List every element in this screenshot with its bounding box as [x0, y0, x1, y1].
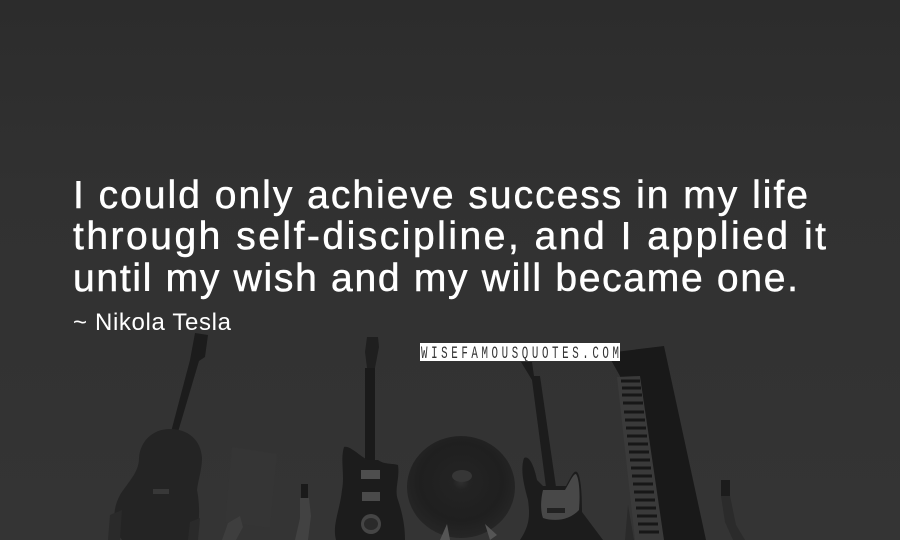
icon: cymbal — [407, 436, 515, 540]
icon: sheet of paper — [225, 447, 277, 528]
icon: bass guitar — [520, 362, 603, 540]
quote text: until my wish and my will became one. — [73, 257, 798, 300]
quote text: through self-discipline, and I applied it — [73, 215, 826, 258]
attribution: ~ Nikola Tesla — [73, 309, 232, 336]
quote text — [73, 174, 826, 300]
watermark: WISEFAMOUSQUOTES.COM — [421, 345, 619, 364]
icon: microphone hand — [295, 484, 311, 540]
icon: hand holding keyboard — [625, 505, 634, 540]
icon: acoustic guitar — [108, 333, 208, 540]
icon: raised hand left — [222, 516, 243, 540]
icon: microphone right — [721, 480, 745, 540]
icon: keyboard — [607, 346, 706, 540]
quote text: I could only achieve success in my life — [73, 174, 808, 217]
icon: electric guitar — [335, 337, 405, 540]
